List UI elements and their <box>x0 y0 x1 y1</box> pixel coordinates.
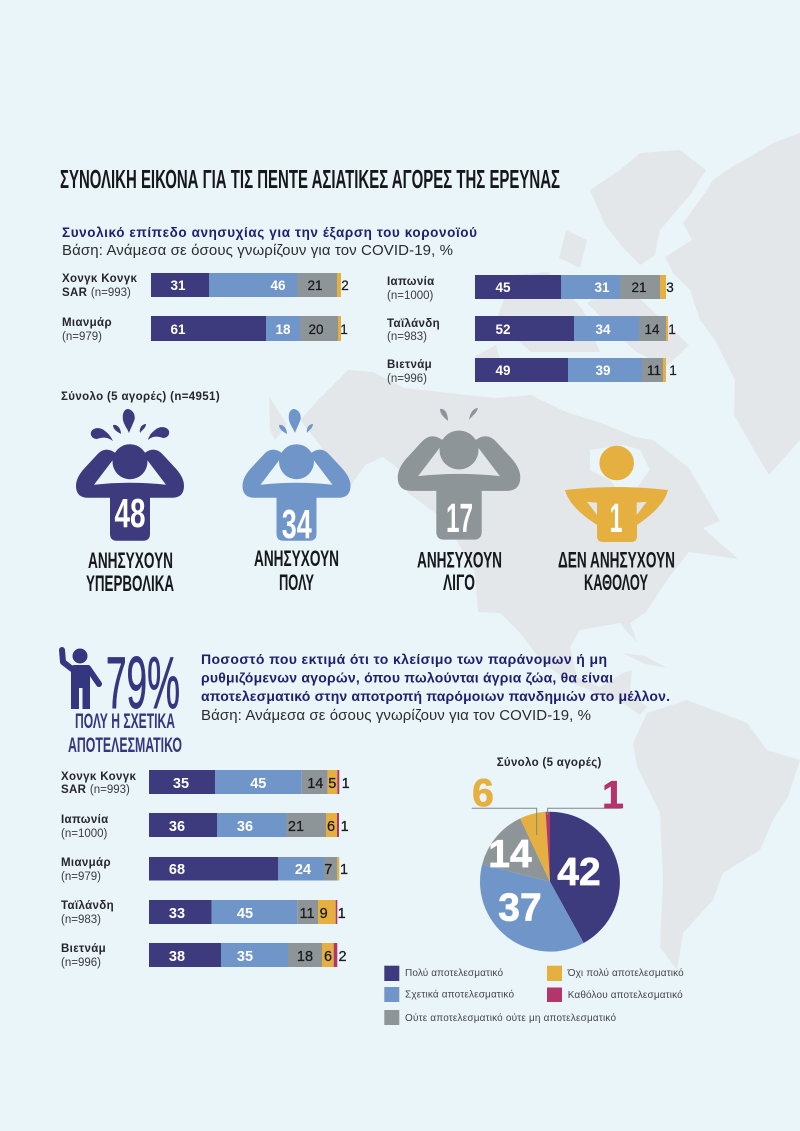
bar row: Hong Kong: Χονγκ Κονγκ <box>61 771 136 783</box>
bar row: Thailand: 11 <box>299 906 315 922</box>
base note: Βάση: Ανάμεσα σε όσους γνωρίζουν για τον COVID-19, % <box>62 242 453 259</box>
bar row: Japan: 6 <box>327 819 335 835</box>
pie chart: total effectiveness <box>472 772 624 952</box>
pie chart: total effectiveness: 6 <box>472 772 494 815</box>
bar row: Japan: 1 <box>341 819 349 835</box>
bar row: Hong Kong: 5 <box>328 776 336 792</box>
bar row: Hong Kong: SAR (n=993) <box>62 287 131 299</box>
icon: extremely worried person 48 <box>76 409 184 541</box>
bar row: Thailand: 9 <box>320 906 328 922</box>
bar row: Hong Kong: 2 <box>341 278 349 293</box>
bar row: Vietnam: (n=996) <box>61 957 101 969</box>
bar row: Vietnam: 39 <box>595 363 611 378</box>
pie chart: total effectiveness: 1 <box>602 774 624 817</box>
callout: 79 percent effective <box>62 643 182 757</box>
total label: Σύνολο (5 αγορές) (n=4951) <box>61 391 220 403</box>
bar row: Thailand: (n=983) <box>387 331 427 343</box>
bar row: Vietnam: 1 <box>669 363 677 378</box>
legend: Όχι πολύ αποτελεσματικό <box>567 967 684 979</box>
bar row: Myanmar: 68 <box>169 862 185 878</box>
bar row: Myanmar: Μιανμάρ <box>61 857 111 869</box>
legend: Σχετικά αποτελεσματικό <box>405 988 514 1000</box>
bar row: Japan: (n=1000) <box>387 290 434 302</box>
label: very worried: ΠΟΛΥ <box>279 570 314 595</box>
bar row: Myanmar: 1 <box>340 862 348 878</box>
bar row: Thailand <box>61 900 346 926</box>
bar row: Japan: 21 <box>288 819 304 835</box>
pie chart: total effectiveness: 14 <box>488 833 532 876</box>
bar row: Hong Kong: 14 <box>307 776 323 792</box>
bar row: Hong Kong: 46 <box>270 278 286 293</box>
bar row: Myanmar: 1 <box>340 322 348 337</box>
bar row: Vietnam <box>387 358 677 385</box>
bar row: Myanmar: 18 <box>275 322 291 337</box>
bar row: Japan: Ιαπωνία <box>387 276 435 288</box>
bar row: Thailand: (n=983) <box>61 914 101 926</box>
bar row: Thailand: 34 <box>595 322 611 337</box>
bar row: Myanmar: (n=979) <box>61 871 101 883</box>
bar row: Myanmar <box>61 857 348 883</box>
icon: very worried person 34 <box>242 409 350 547</box>
bar row: Thailand: 1 <box>668 322 676 337</box>
label: very worried: ΑΝΗΣΥΧΟΥΝ <box>254 546 339 571</box>
bar chart: concern by market <box>62 273 677 385</box>
label: extremely worried <box>86 548 174 596</box>
label: a little worried: ΛΙΓΟ <box>443 570 475 595</box>
bar row: Thailand: Ταϊλάνδη <box>387 318 440 330</box>
label: very worried <box>254 546 339 595</box>
legend: Πολύ αποτελεσματικό <box>405 967 503 979</box>
legend: Καθόλου αποτελεσματικό <box>568 989 683 1001</box>
bar row: Vietnam: Βιετνάμ <box>387 359 432 371</box>
section heading: market closure: αποτελεσματικό στην αποτροπή παρόμοιων πανδημιών στο μέλλον. <box>201 688 670 704</box>
icon: a little worried person 17 <box>398 408 520 541</box>
bar row: Japan: 36 <box>237 819 253 835</box>
icon: extremely worried person 48: 48 <box>114 490 146 536</box>
pie chart: total effectiveness: 42 <box>557 851 601 894</box>
bar row: Japan: 3 <box>666 280 674 295</box>
icon: person waving <box>62 648 99 709</box>
big percentage: 79% <box>106 643 180 724</box>
icon: very worried person 34: 34 <box>282 501 312 547</box>
bar row: Vietnam: 49 <box>495 363 511 378</box>
bar row: Myanmar <box>62 316 348 343</box>
bar row: Hong Kong: 35 <box>173 776 189 792</box>
bar row: Hong Kong: 31 <box>170 278 186 293</box>
section heading: market closure: ρυθμιζόμενων αγορών, όπου πωλούνται άγρια ζώα, θα είναι <box>201 670 613 686</box>
bar row: Hong Kong <box>61 770 350 796</box>
bar row: Thailand: 33 <box>169 906 185 922</box>
callout: 79 percent effective: ΑΠΟΤΕΛΕΣΜΑΤΙΚΟ <box>68 734 182 757</box>
bar chart: effectiveness by market <box>61 770 350 969</box>
label: a little worried <box>417 548 502 595</box>
label: a little worried: ΑΝΗΣΥΧΟΥΝ <box>417 548 502 572</box>
bar row: Thailand: 14 <box>644 322 660 337</box>
bar row: Hong Kong: 1 <box>342 776 350 792</box>
bar row: Japan: 21 <box>631 280 647 295</box>
pie chart: total effectiveness: 37 <box>498 886 542 930</box>
bar row: Thailand: 45 <box>237 906 253 922</box>
icon: not worried person 1 <box>565 446 668 542</box>
bar row: Thailand: 1 <box>338 906 346 922</box>
bar row: Vietnam: 11 <box>647 363 661 378</box>
bar row: Vietnam: 38 <box>169 949 185 965</box>
bar row: Hong Kong <box>62 273 349 299</box>
bar row: Thailand <box>387 316 676 343</box>
bar row: Vietnam: 35 <box>237 949 253 965</box>
section heading: concern level: Συνολικό επίπεδο ανησυχίας για την έξαρση του κορονοϊού <box>62 225 477 240</box>
bar row: Japan: 31 <box>594 280 610 295</box>
bar row: Vietnam: 2 <box>338 949 347 965</box>
section heading: market closure: Ποσοστό που εκτιμά ότι το κλείσιμο των παράνομων ή μη <box>201 651 607 667</box>
bar row: Japan <box>387 275 674 302</box>
bar row: Myanmar: 24 <box>295 862 311 878</box>
bar row: Hong Kong: 21 <box>307 278 323 293</box>
label: extremely worried: ΑΝΗΣΥΧΟΥΝ <box>88 548 173 573</box>
bar row: Myanmar: 7 <box>324 862 332 878</box>
section heading: market closure <box>201 651 670 704</box>
bar row: Myanmar: 61 <box>170 322 186 337</box>
callout: 79 percent effective: ΠΟΛΥ Η ΣΧΕΤΙΚΑ <box>75 710 175 733</box>
bar row: Thailand: Ταϊλάνδη <box>61 900 114 912</box>
bar row: Myanmar: (n=979) <box>62 331 102 343</box>
bar row: Vietnam: 6 <box>324 949 332 965</box>
bar row: Hong Kong: SAR (n=993) <box>61 784 130 796</box>
icon: not worried person 1: 1 <box>610 495 622 541</box>
bar row: Vietnam <box>61 943 347 969</box>
label: not worried at all: ΔΕΝ ΑΝΗΣΥΧΟΥΝ <box>558 548 675 572</box>
bar row: Myanmar: 20 <box>308 322 324 337</box>
bar row: Japan: 45 <box>495 280 511 295</box>
bar row: Japan <box>61 813 349 840</box>
pie chart title: Σύνολο (5 αγορές) <box>497 757 602 769</box>
label: not worried at all <box>558 548 675 595</box>
bar row: Hong Kong: Χονγκ Κονγκ <box>62 273 137 285</box>
bar row: Japan: Ιαπωνία <box>61 814 109 826</box>
legend <box>384 966 684 1025</box>
bar row: Japan: (n=1000) <box>61 828 108 840</box>
bar row: Japan: 36 <box>169 819 185 835</box>
label: not worried at all: ΚΑΘΟΛΟΥ <box>584 570 648 595</box>
base note: Βάση: Ανάμεσα σε όσους γνωρίζουν για τον COVID-19, % <box>201 707 591 724</box>
legend: Ούτε αποτελεσματικό ούτε μη αποτελεσματικό <box>405 1012 616 1024</box>
bar row: Hong Kong: 45 <box>250 776 266 792</box>
icon: a little worried person 17: 17 <box>446 495 473 541</box>
background world map <box>269 133 800 970</box>
bar row: Vietnam: (n=996) <box>387 373 427 385</box>
bar row: Vietnam: Βιετνάμ <box>61 943 106 955</box>
label: extremely worried: ΥΠΕΡΒΟΛΙΚΑ <box>86 571 174 596</box>
bar row: Thailand: 52 <box>495 322 511 337</box>
bar row: Vietnam: 18 <box>297 949 313 965</box>
bar row: Myanmar: Μιανμάρ <box>62 317 112 329</box>
